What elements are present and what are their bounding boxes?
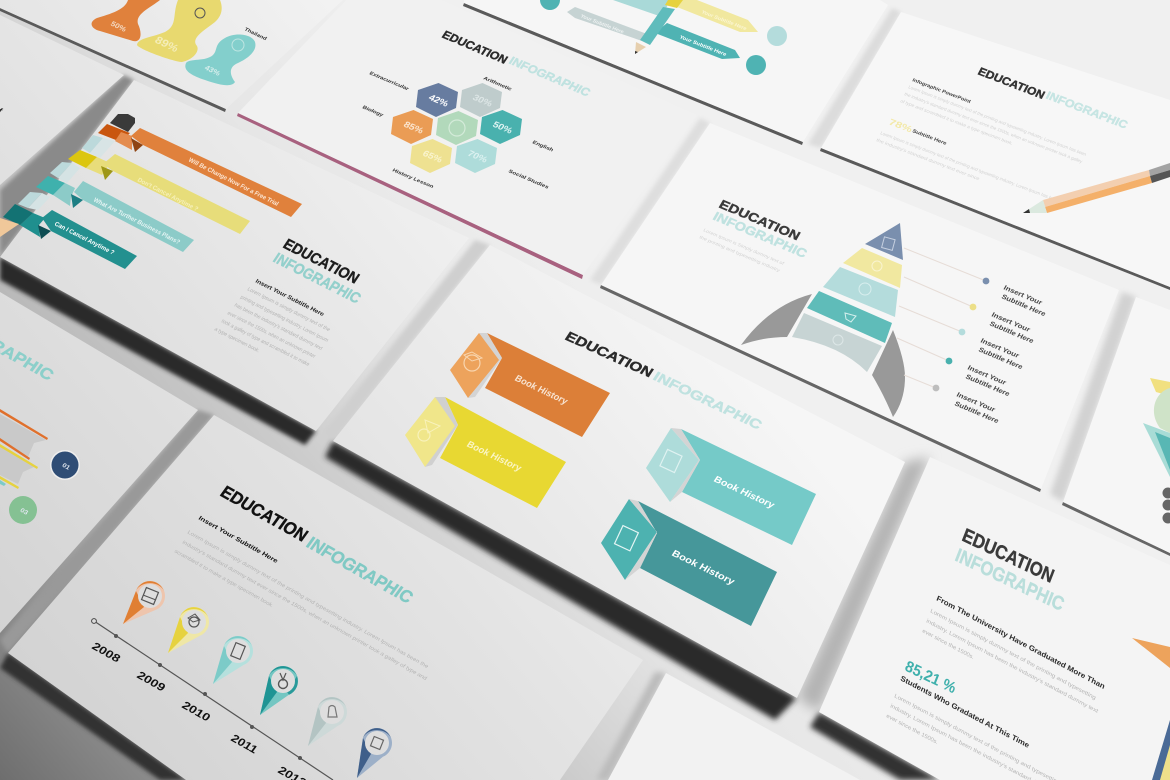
pin: 2008	[123, 581, 165, 624]
title: INFOGRAPHIC	[270, 250, 364, 307]
timeline years: 2011	[228, 732, 261, 756]
hexagon labels: Social Studies	[507, 169, 550, 190]
ribbon: yellow: Don't Cancel Anytime ?	[136, 177, 199, 213]
text block: Lorem Ipsum is simply dummy text of the printing and typesetting industry. Lorem Ipsum has been	[879, 131, 1060, 204]
text block: industry's standard dummy text ever since the 1500s, when an unknown printer took a galley of type and	[181, 540, 428, 682]
panel: right edge slide	[1062, 297, 1170, 556]
subtext: the printing and typesetting industry	[698, 235, 782, 274]
panel: timeline slide	[8, 415, 643, 780]
rocket labels: Subtitle Here	[964, 373, 1011, 398]
pale connector strips	[18, 135, 115, 210]
text block: the industry's standard dummy text ever since	[875, 138, 981, 182]
number circles: 03	[19, 507, 29, 517]
book: yellow: Book History	[464, 440, 524, 474]
ribbon: orange: Will Be Change Now For a Free Trial	[187, 157, 280, 208]
teal blob	[185, 35, 255, 85]
title	[270, 236, 364, 307]
teal blob: 43%	[203, 63, 222, 78]
text block: scrambled it to make a type specimen book.	[173, 549, 275, 609]
subtext: Lorem Ipsum is Simply dummy text of	[702, 228, 786, 267]
title: INFOGRAPHIC	[506, 54, 593, 99]
rocket labels: Subtitle Here	[953, 400, 1000, 425]
title: EDUCATION	[439, 28, 510, 66]
title: EDUCATION	[216, 483, 311, 546]
partial graphic: blue pencil	[1152, 720, 1170, 780]
book: orange	[450, 333, 610, 437]
title	[976, 65, 1131, 131]
pin: 2012	[308, 697, 347, 746]
rocket labels: Insert Your	[979, 337, 1021, 360]
title: INFOGRAPHIC	[302, 534, 417, 608]
arrows: Your Subtitle Here	[579, 14, 625, 35]
panel: statistics slide	[819, 457, 1170, 780]
timeline years: 2010	[179, 699, 214, 724]
ribbon: light teal: What Are Turther Business Plans?	[92, 197, 181, 246]
book: yellow	[405, 397, 566, 508]
text block: the industry's standard dummy text ever since the 1500s, when an unknown printer took a galley	[903, 92, 1084, 165]
hexagon chart: 50%	[490, 120, 515, 136]
panel: bottom blank slide	[608, 673, 860, 780]
title: EDUCATION	[717, 197, 803, 243]
title: INFOGRAPHIC	[1044, 89, 1131, 131]
panel: pencil arrows slide	[463, 0, 888, 145]
partial graphic: orange pencil tip	[1132, 638, 1170, 668]
number circles: 01	[61, 462, 71, 472]
panel: pencil slide	[820, 12, 1170, 290]
panel: numbered books slide	[0, 292, 198, 633]
stacked bars	[0, 409, 48, 489]
arrow circles	[540, 0, 787, 75]
book: light teal	[646, 428, 816, 545]
text block	[213, 278, 331, 368]
statistic: 85,21 %: 85,21 %	[903, 658, 958, 697]
hexagon chart: 70%	[465, 149, 490, 165]
title	[216, 483, 417, 608]
rocket labels: Insert Your	[966, 364, 1008, 387]
hexagon chart: 65%	[420, 149, 445, 165]
title: EDUCATION	[976, 65, 1047, 102]
rocket labels	[953, 284, 1047, 425]
text block: university: ever since the 1500s.	[921, 628, 975, 661]
text block: students: ever since the 1500s.	[885, 713, 939, 746]
panel: blobs slide	[0, 0, 343, 112]
hexagon labels: English	[531, 140, 554, 153]
orange blob: 50%	[109, 19, 128, 34]
panel: book history slide	[333, 245, 905, 698]
title: EDUCATION	[562, 330, 656, 381]
text block: has been the industry's standard dummy text	[233, 303, 324, 352]
hexagon chart	[391, 83, 522, 173]
title	[562, 330, 765, 433]
partial graphic	[1143, 378, 1170, 524]
rocket labels: Subtitle Here	[988, 320, 1035, 345]
text block: Insert Your Subtitle Here	[197, 515, 279, 565]
title: INFOGRAPHIC	[650, 370, 765, 433]
hexagon labels: Biology	[361, 105, 384, 118]
hexagon chart: 42%	[426, 93, 451, 109]
panel: ribbons slide	[0, 80, 469, 431]
hexagon labels: Extracurricular	[368, 71, 410, 92]
hexagon labels: History Lesson	[391, 168, 435, 190]
book: light teal: Book History	[711, 475, 777, 511]
text block: university	[921, 594, 1106, 715]
arrows: Your Subtitle Here	[700, 10, 748, 32]
hexagon chart: 85%	[401, 120, 426, 136]
text block: university: Lorem Ipsum is simply dummy text of the printing and typesetting	[929, 608, 1097, 701]
hexagon labels	[361, 71, 554, 190]
arrows: Your Subtitle Here	[678, 35, 727, 58]
yellow blob: 89%	[152, 35, 180, 55]
timeline years: 2008	[89, 640, 124, 665]
text block: printing and typesetting industry. Lorem Ipsum	[239, 295, 330, 344]
hexagon chart: 30%	[470, 93, 495, 109]
text block: students: Students Who Gradated At This Time	[899, 674, 1030, 750]
title: EDUCATION	[959, 525, 1057, 587]
book: orange: Book History	[512, 374, 570, 407]
pin: 2009	[168, 607, 209, 653]
text block: of type and scrambled it to make a type specimen book.	[899, 99, 1014, 147]
rocket labels: Insert Your	[955, 391, 997, 414]
text block: took a galley of type and scrambled it to make	[220, 319, 310, 368]
timeline years	[89, 640, 310, 780]
rocket labels: Insert Your	[1002, 284, 1044, 307]
connector lines and dots	[897, 248, 989, 391]
label: Thailand: Thailand	[243, 27, 268, 42]
text block: Subtitle Here	[911, 129, 947, 147]
ribbon: light teal	[36, 176, 194, 252]
ribbon: yellow	[68, 150, 250, 234]
pin: final	[357, 728, 392, 778]
ribbon: orange	[98, 114, 302, 217]
title: EDUCATION	[280, 236, 362, 287]
ribbon: dark teal: Can I Cancel Anytime ?	[53, 221, 115, 256]
rocket	[741, 223, 905, 417]
rocket labels: Insert Your	[990, 311, 1032, 334]
text block: university: industry. Lorem Ipsum has been the industry's standard dummy text	[925, 618, 1099, 715]
pin: 2011	[260, 666, 298, 715]
title	[439, 28, 593, 99]
arrows	[567, 0, 758, 59]
title: INFOGRAPHIC	[952, 545, 1067, 616]
ribbon: dark teal	[0, 204, 137, 269]
text block: Lorem Ipsum is simply dummy text of the	[246, 287, 331, 333]
text block: 78%	[887, 117, 915, 135]
text block: university: From The University Have Graduated More Than	[935, 594, 1106, 691]
book: dark teal: Book History	[669, 549, 737, 587]
hexagon labels: Arithmetic	[482, 76, 513, 92]
text block: Infographic PowerPoint	[911, 78, 972, 105]
timeline axis	[92, 619, 333, 780]
text block: a type specimen book.	[213, 327, 261, 354]
rocket labels: Subtitle Here	[1000, 293, 1047, 318]
text block: Insert Your Subtitle Here	[254, 278, 326, 318]
title	[952, 525, 1067, 616]
text block: students: Lorem Ipsum is simply dummy text of the printing and typesetting	[893, 693, 1061, 780]
book: dark teal	[601, 499, 777, 626]
rocket labels: Subtitle Here	[977, 346, 1024, 371]
pin: 2010	[213, 636, 253, 684]
title: INFOGRAPHIC	[711, 209, 810, 261]
text block: Lorem Ipsum is simply dummy text of the printing and typesetting industry. Lorem Ipsum has been the	[186, 530, 429, 670]
orange blob	[92, 0, 160, 41]
panel: far-left blank slide	[0, 15, 124, 185]
pencil	[1023, 163, 1170, 213]
panel: rocket slide	[600, 123, 1119, 492]
text block	[875, 78, 1088, 204]
timeline years: 2009	[134, 669, 169, 694]
panel: hexagon slide	[237, 0, 697, 279]
yellow blob	[137, 0, 222, 62]
text block: Lorem Ipsum is simply dummy text of the printing and typesetting industry. Lorem Ipsum has been	[907, 85, 1088, 158]
text block: ever since the 1500s, when an unknown printer	[226, 311, 316, 360]
number circles	[9, 450, 80, 524]
